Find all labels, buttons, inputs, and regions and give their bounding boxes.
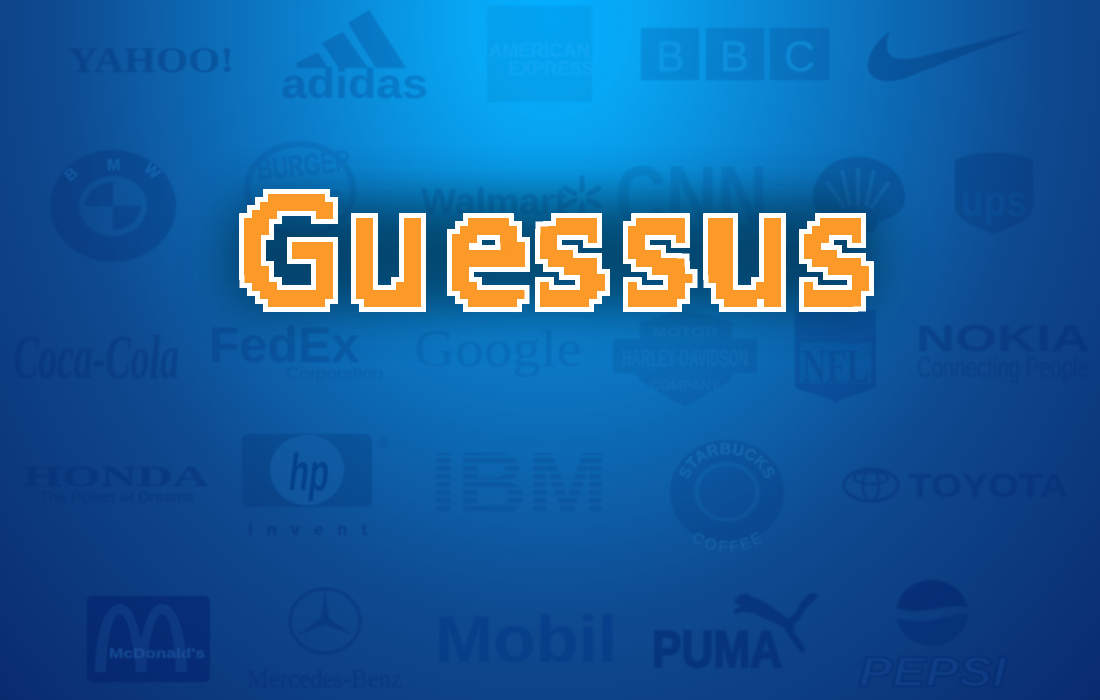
logo: Burger King: KING [278,185,346,216]
logo: Burger King [247,144,353,236]
logo: BMW [50,150,176,262]
logo: Honda [23,462,210,506]
logo: Harley-Davidson: MOTOR [652,324,718,341]
logo: NFL [795,310,876,403]
logo: Pepsi [859,580,1008,695]
logo: Nokia [916,318,1090,384]
logo: BMW: M [107,157,120,174]
logo: IBM: IBM [430,434,608,533]
logo: Burger King: BURGER [255,144,352,187]
logo: HP: hp [289,444,329,502]
logo: Puma [652,593,818,679]
logo: Starbucks [670,440,782,551]
logo: Toyota: TOYOTA [908,467,1068,504]
logo: Coca-Cola: Coca-Cola [13,324,179,392]
logo: BBC: C [784,33,815,81]
logo: American Express [487,6,594,102]
logo: BMW: B [62,165,81,185]
logo: NFL: NFL [802,340,869,393]
title: Guessus wordmark: Guessus [238,167,871,339]
logo: Starbucks: COFFEE [694,532,761,551]
logo: Harley-Davidson: HARLEY-DAVIDSON [622,345,748,372]
logo: BBC: B [656,33,685,81]
logo: HP: invent [248,520,367,539]
logo: Mercedes-Benz: Mercedes-Benz [247,666,402,693]
logo: American Express: EXPRESS [508,59,594,80]
logo: HP [242,434,389,539]
logo: BBC [641,28,829,81]
logo: Walmart: Walmart [421,181,567,222]
logo: adidas [281,10,428,107]
logo: Toyota [844,467,1068,504]
logo: Mobil: Mobil [435,602,617,676]
logo: Google: Google [414,321,582,378]
logo: UPS [955,152,1033,234]
logo: CNN: CNN [615,149,768,245]
logo: Honda: HONDA [23,462,210,493]
logo: adidas: adidas [281,60,428,107]
logo: Pepsi: PEPSI [859,648,1008,695]
logo: Yahoo: YAHOO! [68,40,234,80]
title shadow [228,198,878,310]
logo: Honda: The Power of Dreams [39,489,194,506]
logo: BBC: B [720,33,749,81]
logo: BMW: W [140,160,164,183]
logo: Mercedes-Benz [247,589,402,693]
logo: Nike swoosh [868,29,1032,81]
logo: Puma: PUMA [652,621,782,679]
logo: FedEx: Corporation [286,364,383,383]
logo: Starbucks: STARBUCKS [680,442,775,478]
logo: FedEx: FedEx [209,317,359,373]
logo: Shell [813,157,905,232]
logo: Nokia: NOKIA [916,318,1090,359]
logo: American Express: AMERICAN [489,41,590,62]
logo: Harley-Davidson [613,310,757,407]
logo: McDonald's [87,596,210,682]
logo: McDonald's: McDonald's [109,645,205,661]
logo: Harley-Davidson: COMPANY [650,377,720,394]
logo: HP: ® [378,434,389,450]
logo: UPS: ups [961,177,1027,226]
